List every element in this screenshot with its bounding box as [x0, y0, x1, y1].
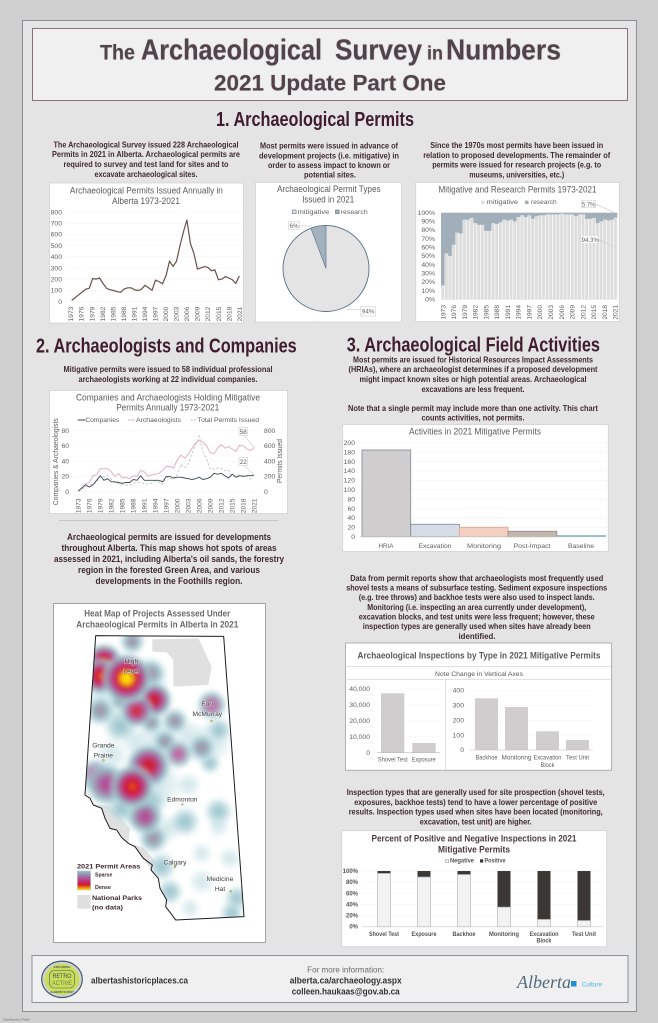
- combo line chart: companies and archaeologists: 80: [61, 428, 69, 435]
- archaeologists line: [78, 441, 254, 491]
- combo line chart: companies and archaeologists: 1976: [87, 498, 94, 513]
- bar: Monitoring: [459, 527, 508, 537]
- legend: Positive: [484, 859, 506, 865]
- line chart: permits issued annually: 2003: [174, 306, 181, 321]
- left inspections chart: 40,000: [349, 686, 370, 693]
- stacked bar chart: positive and negative: Excavation: [530, 931, 559, 938]
- line chart: permits issued annually: 1988: [121, 306, 128, 321]
- stacked bar chart: positive and negative: [342, 831, 607, 947]
- right inspections chart: 200: [453, 717, 464, 724]
- contact info: colleen.haukaas@gov.ab.ca: [292, 986, 401, 996]
- title line 1: The: [100, 42, 135, 64]
- right inspections chart: 300: [453, 702, 464, 710]
- line chart: permits issued annually: 2012: [205, 306, 212, 321]
- text: positive results: exposures, backhoe tests) tend to have a lower percentage of positive: [354, 797, 597, 807]
- line chart: permits issued annually: 1997: [152, 306, 160, 321]
- stacked bar chart: mitigative and research: [416, 182, 620, 322]
- text: permits since 1970s: Since the 1970s most permits have been issued in: [430, 140, 603, 150]
- axis title right: Permits Issued: [277, 439, 284, 483]
- callout 58: 58: [240, 429, 247, 436]
- small credit: Classification Fields: [3, 1018, 30, 1022]
- legend: Archaeologists: [136, 417, 182, 424]
- bar chart: activities: 20: [347, 525, 355, 532]
- text: archaeologists and companies: [64, 364, 272, 384]
- city labels: [92, 658, 234, 893]
- stacked bar chart: positive and negative: 20%: [346, 914, 359, 920]
- logo: Retro Active: ACTIVE: [52, 981, 72, 987]
- permits line: [72, 220, 239, 300]
- legend: research: [341, 209, 368, 216]
- combo line chart: companies and archaeologists: 1991: [142, 498, 149, 513]
- bar: Excavation: [411, 524, 459, 537]
- text: inspections: Monitoring (i.e. inspecting an area currently under development),: [367, 602, 586, 612]
- bar chart: activities: 80: [347, 496, 355, 503]
- heading: section 1: 1. Archaeological Permits: [216, 109, 414, 131]
- stacked bar chart: mitigative and research: 2015: [591, 305, 598, 320]
- text: inspections: inspection types are generally used when sites have already been: [363, 621, 591, 631]
- stacked bar chart: positive and negative: Shovel Test: [369, 931, 399, 938]
- bar chart: activities: 100: [344, 487, 355, 494]
- text: permits since 1970s: permits were issued for research projects (e.g. to: [432, 160, 601, 170]
- stacked bar chart: mitigative and research: 0%: [425, 296, 435, 304]
- combo line chart: companies and archaeologists: Companies and Archaeologists Holding Mitigative: [76, 393, 260, 403]
- text: inspections: Data from permit reports show that archaeologists most frequently used: [350, 573, 603, 583]
- text: HRIAs: excavations are less frequent.: [422, 384, 524, 394]
- combo line chart: companies and archaeologists: 60: [61, 443, 69, 450]
- bar charts: inspections by type: Note Change in Vertical Axes: [435, 671, 524, 678]
- callout 6%: 6%: [289, 223, 299, 230]
- title line 1: Archaeological: [141, 34, 322, 66]
- stacked bar chart: mitigative and research: 2006: [559, 305, 566, 320]
- stacked bar chart: mitigative and research: 60%: [421, 245, 435, 252]
- text: archaeologists and companies: archaeologists working at 22 individual companies.: [78, 374, 258, 384]
- stacked bar chart: mitigative and research: 80%: [421, 227, 435, 234]
- bar chart: activities: Monitoring: [467, 543, 502, 550]
- text: mitigative permits: order to assess impact to known or: [268, 160, 391, 170]
- right inspections chart: Test Unit: [566, 754, 589, 761]
- callout 6%: [288, 222, 312, 230]
- combo line chart: companies and archaeologists: 200: [264, 474, 276, 481]
- callout 94.3%: [582, 236, 615, 247]
- combo line chart: companies and archaeologists: [50, 390, 288, 514]
- map legend: 2021 Permit Areas: [77, 863, 141, 870]
- callout 94.3%: 94.3%: [582, 238, 599, 244]
- legend: Companies: [85, 417, 120, 424]
- legend: mitigative: [487, 199, 518, 206]
- legend: research: [531, 199, 557, 206]
- right inspections chart: Monitoring: [502, 754, 532, 761]
- legend: [446, 859, 506, 865]
- combo line chart: companies and archaeologists: 2021: [252, 498, 259, 513]
- city labels: Calgary: [164, 859, 187, 866]
- combo line chart: companies and archaeologists: 2018: [241, 498, 248, 513]
- bar chart: activities: 40: [347, 515, 355, 522]
- line chart: permits issued annually: 0: [58, 299, 62, 306]
- callout 22: [239, 457, 254, 475]
- text: HRIAs: Most permits are issued for Historical Resources Impact Assessments: [353, 354, 593, 364]
- bar chart: activities: Post-Impact: [514, 543, 551, 550]
- map title: Archaeological Permits in Alberta in 2021: [76, 619, 238, 629]
- stacked bar chart: positive and negative: 100%: [343, 869, 359, 875]
- bar chart: activities: 140: [344, 468, 355, 475]
- line chart: permits issued annually: 300: [51, 265, 62, 272]
- text: permits issued: The Archaeological Survey issued 228 Archaeological: [54, 139, 238, 149]
- text: permits issued: Permits in 2021 in Alberta. Archaeological permits are: [52, 149, 240, 159]
- combo line chart: companies and archaeologists: 1982: [109, 498, 116, 513]
- right inspections chart: Backhoe: [476, 754, 498, 761]
- stacked bar chart: positive and negative: 0%: [349, 925, 359, 931]
- stacked bar chart: positive and negative: 80%: [346, 880, 359, 886]
- line chart: permits issued annually: 1979: [89, 306, 96, 321]
- combo line chart: companies and archaeologists: 1979: [98, 498, 105, 513]
- combo line chart: companies and archaeologists: 2012: [219, 498, 226, 513]
- line chart: permits issued annually: 2009: [195, 306, 202, 321]
- bar: HRIA: [362, 450, 411, 537]
- map legend: [77, 863, 142, 912]
- callout 5.7%: [582, 200, 615, 213]
- bar: Baseline: [557, 536, 606, 537]
- bar chart: activities: Excavation: [418, 543, 452, 550]
- line chart: permits issued annually: 700: [51, 220, 62, 228]
- line chart: permits issued annually: 1985: [110, 306, 117, 321]
- mitigative bars: [441, 214, 617, 299]
- city labels: Hat: [215, 886, 225, 893]
- bar: Post-Impact: [508, 531, 557, 537]
- text: positive results: results. Inspection types used when sites have been located (monitoring,: [349, 807, 603, 817]
- combo line chart: companies and archaeologists: 1973: [76, 498, 83, 513]
- line chart: permits issued annually: 2015: [216, 306, 223, 321]
- text: map description: assessed in 2021, including Alberta's oil sands, the forestry: [54, 554, 285, 565]
- bar chart: activities: 0: [351, 534, 355, 541]
- stacked bar chart: mitigative and research: 2009: [570, 305, 576, 320]
- city labels: McMurray: [193, 711, 223, 718]
- title line 1: Numbers: [446, 34, 561, 66]
- map legend: Dense: [95, 885, 111, 891]
- total permits line: [78, 436, 254, 491]
- bar chart: activities: HRIA: [378, 543, 394, 550]
- bar chart: activities: 60: [347, 506, 355, 513]
- stacked bar chart: positive and negative: Test Unit: [572, 931, 596, 938]
- stacked bar chart: positive and negative: Monitoring: [489, 931, 519, 938]
- combo line chart: companies and archaeologists: Permits Annually 1973-2021: [116, 403, 219, 413]
- title line 2: 2021 Update Part One: [214, 70, 446, 96]
- stacked bar chart: mitigative and research: 2018: [602, 305, 609, 320]
- legend: [78, 417, 259, 424]
- title line 1: in: [427, 44, 443, 64]
- stacked bar chart: mitigative and research: 1985: [483, 305, 490, 320]
- text: positive results: Inspection types that are generally used for site prospection (shovel tests,: [347, 787, 605, 797]
- text: inspections: excavation blocks, and test units were less frequent; however, these: [359, 612, 595, 622]
- research bars: [441, 213, 617, 299]
- text: map description: region in the forested Green Area, and various: [78, 565, 260, 576]
- left inspections chart: [349, 686, 440, 764]
- national parks: [92, 638, 212, 870]
- line chart: permits issued annually: 400: [51, 254, 62, 261]
- logo: Retro Active: RETRO: [52, 973, 72, 980]
- bar chart: activities: Baseline: [568, 543, 594, 550]
- combo line chart: companies and archaeologists: 1994: [153, 498, 160, 513]
- combo line chart: companies and archaeologists: 1988: [131, 498, 138, 513]
- text: inspections: (e.g. tree throws) and backhoe tests were also used to inspect lands.: [359, 592, 595, 602]
- contact info: alberta.ca/archaeology.aspx: [290, 975, 402, 985]
- line chart: permits issued annually: 1991: [131, 306, 138, 321]
- stacked bar chart: mitigative and research: 1973: [440, 305, 447, 320]
- text: mitigative permits: Most permits were issued in advance of: [260, 141, 398, 151]
- city labels: Medicine: [207, 876, 234, 883]
- left inspections chart: Exposure: [412, 757, 436, 764]
- line chart: permits issued annually: Archaeological Permits Issued Annually in: [70, 186, 223, 196]
- combo line chart: companies and archaeologists: 400: [264, 458, 276, 466]
- callout 5.7%: 5.7%: [582, 202, 596, 208]
- bar charts: inspections by type: Archaeological Inspections by Type in 2021 Mitigative Permits: [358, 649, 600, 660]
- legend: Negative: [450, 859, 475, 865]
- text: permits issued: [52, 139, 240, 179]
- combo line chart: companies and archaeologists: 0: [264, 489, 268, 496]
- combo line chart: companies and archaeologists: 0: [65, 489, 69, 496]
- stacked bar chart: positive and negative: Backhoe: [452, 931, 476, 938]
- stacked bar chart: mitigative and research: 1979: [462, 305, 469, 320]
- text: inspections: [346, 573, 607, 641]
- stacked bar chart: mitigative and research: Mitigative and Research Permits 1973-2021: [438, 184, 596, 194]
- pie chart: permit types: Issued in 2021: [302, 195, 354, 205]
- text: mitigative permits: development projects (i.e. mitigative) in: [259, 150, 399, 160]
- stacked bar chart: mitigative and research: 40%: [421, 262, 435, 269]
- bar chart: activities: Activities in 2021 Mitigative Permits: [409, 427, 541, 437]
- stacked bar chart: mitigative and research: 1994: [516, 305, 523, 320]
- city labels: Edmonton: [167, 797, 198, 804]
- bar chart: activities: 120: [344, 478, 355, 485]
- map title: Heat Map of Projects Assessed Under: [84, 609, 231, 619]
- stacked bar chart: positive and negative: Mitigative Permits: [438, 845, 510, 856]
- callout 94%: 94%: [362, 309, 375, 316]
- text: archaeologists and companies: Mitigative permits were issued to 58 individual professional: [64, 364, 272, 374]
- line chart: permits issued annually: 600: [51, 232, 62, 239]
- combo line chart: companies and archaeologists: 2009: [208, 498, 215, 513]
- stacked bar chart: mitigative and research: 2003: [548, 305, 555, 320]
- line chart: permits issued annually: 1982: [100, 306, 107, 321]
- callout 22: 22: [240, 459, 247, 466]
- right inspections chart: [453, 688, 593, 769]
- right inspections chart: 100: [453, 732, 464, 739]
- heat spots: [86, 636, 244, 918]
- axis title left: Companies & Archaeologists: [53, 418, 60, 505]
- line chart: permits issued annually: 200: [51, 276, 62, 283]
- bar chart: activities: 200: [344, 440, 355, 447]
- stacked bar chart: positive and negative: 40%: [346, 902, 359, 908]
- text: positive results: [347, 787, 605, 826]
- companies line: [78, 473, 254, 491]
- stacked bar chart: positive and negative: Percent of Positive and Negative Inspections in 2021: [372, 834, 577, 845]
- stacked bar chart: positive and negative: 60%: [346, 891, 359, 897]
- city labels: High: [124, 658, 138, 665]
- logo: Alberta Culture: Culture: [582, 982, 602, 989]
- logo: Alberta Culture: [516, 972, 602, 992]
- left inspections chart: 30,000: [349, 702, 370, 709]
- logo: Retro Active: EXPLORING: [54, 965, 70, 969]
- map legend: (no data): [92, 905, 123, 912]
- heading: section 3: 3. Archaeological Field Activities: [347, 335, 600, 357]
- line chart: permits issued annually: [50, 183, 244, 323]
- right inspections chart: 0: [460, 747, 464, 754]
- combo line chart: companies and archaeologists: 2015: [230, 498, 237, 513]
- combo line chart: companies and archaeologists: 800: [264, 428, 276, 435]
- city labels: Grande: [92, 743, 115, 750]
- website: albertashistoricplaces.ca: [91, 976, 189, 986]
- callout 94%: [347, 307, 376, 316]
- contact info: For more information:: [307, 965, 384, 974]
- bar charts: inspections by type: [346, 643, 612, 770]
- combo line chart: companies and archaeologists: 20: [61, 474, 69, 481]
- text: inspections: identified.: [458, 631, 496, 641]
- pie chart: permit types: [256, 182, 402, 322]
- text: map description: throughout Alberta. This map shows hot spots of areas: [62, 543, 276, 554]
- legend: [292, 209, 368, 216]
- left inspections chart: Shovel Test: [378, 757, 408, 764]
- map title: [76, 609, 238, 629]
- line chart: permits issued annually: 2006: [184, 306, 191, 321]
- line chart: permits issued annually: 100: [51, 288, 62, 295]
- text: mitigative permits: potential sites.: [304, 170, 356, 180]
- line chart: permits issued annually: 500: [51, 243, 62, 250]
- left inspections chart: 10,000: [349, 734, 370, 741]
- title line 1: [100, 34, 561, 66]
- line chart: permits issued annually: Alberta 1973-2021: [112, 196, 180, 206]
- text: mitigative permits: [259, 141, 399, 180]
- stacked bar chart: mitigative and research: 2000: [537, 305, 544, 320]
- right inspections chart: 400: [453, 688, 464, 695]
- stacked bar chart: mitigative and research: 1991: [505, 305, 512, 320]
- text: HRIAs: (HRIAs), where an archaeologist determines if a proposed development: [348, 364, 598, 374]
- legend: [481, 199, 557, 206]
- text: map description: Archaeological permits are issued for developments: [67, 532, 271, 543]
- left inspections chart: 0: [366, 750, 370, 757]
- text: HRIAs: might impact known sites or high potential areas. Archaeological: [360, 374, 586, 384]
- text: HRIAs: Note that a single permit may include more than one activity. This chart: [348, 403, 598, 413]
- stacked bar chart: mitigative and research: 2012: [580, 305, 587, 320]
- Alberta outline: [85, 636, 244, 920]
- combo line chart: companies and archaeologists: 2003: [186, 498, 193, 513]
- text: permits issued: excavate archaeological sites.: [94, 169, 198, 179]
- combo line chart: companies and archaeologists: 1997: [164, 498, 171, 513]
- line chart: permits issued annually: 2021: [237, 306, 244, 321]
- positive bars: [378, 871, 590, 927]
- city labels: Fort: [201, 701, 213, 708]
- stacked bar chart: mitigative and research: 20%: [421, 279, 435, 286]
- line chart: permits issued annually: 1994: [142, 306, 149, 321]
- combo line chart: companies and archaeologists: 2006: [197, 498, 204, 513]
- pie chart: permit types: Archaeological Permit Types: [277, 184, 381, 194]
- text: HRIAs: [348, 354, 598, 423]
- pie: [283, 226, 369, 312]
- contact info: [290, 965, 402, 996]
- stacked bar chart: positive and negative: Exposure: [412, 931, 437, 938]
- right inspections chart: Excavation: [534, 754, 562, 761]
- stacked bar chart: mitigative and research: 1976: [451, 305, 458, 320]
- text: permits since 1970s: relation to proposed developments. The remainder of: [423, 150, 610, 160]
- text: map description: [54, 532, 285, 587]
- city labels: Prairie: [94, 753, 113, 760]
- text: positive results: excavation, test unit) are higher.: [420, 816, 532, 826]
- stacked bar chart: mitigative and research: 70%: [421, 236, 435, 243]
- heat map panel: [54, 604, 266, 942]
- stacked bar chart: mitigative and research: 2021: [613, 305, 620, 320]
- stacked bar chart: mitigative and research: 10%: [421, 288, 435, 295]
- stacked bar chart: mitigative and research: 1982: [473, 305, 480, 320]
- text: permits issued: required to survey and test land for sites and to: [64, 159, 228, 169]
- stacked bar chart: mitigative and research: 1997: [526, 305, 534, 320]
- title line 1: Survey: [335, 34, 422, 66]
- text: HRIAs: counts activities, not permits.: [422, 413, 524, 423]
- negative bars: [378, 874, 590, 927]
- footer panel: [32, 956, 628, 1002]
- map legend: National Parks: [92, 895, 142, 902]
- combo line chart: companies and archaeologists: 600: [264, 443, 276, 450]
- line chart: permits issued annually: 2018: [226, 306, 233, 321]
- combo line chart: companies and archaeologists: 1985: [120, 498, 127, 513]
- line chart: permits issued annually: 1973: [68, 306, 75, 321]
- stacked bar chart: mitigative and research: 90%: [421, 219, 435, 226]
- bar chart: activities: [343, 424, 608, 552]
- title banner: [32, 28, 628, 100]
- text: permits since 1970s: museums, universities, etc.): [469, 170, 564, 180]
- logo: Retro Active: [42, 961, 82, 998]
- stacked bar chart: mitigative and research: 50%: [421, 253, 435, 260]
- line chart: permits issued annually: 2000: [163, 306, 170, 321]
- stacked bar chart: mitigative and research: 30%: [421, 271, 435, 278]
- text: map description: developments in the Foothills region.: [96, 576, 242, 587]
- map legend: Sparse: [95, 873, 112, 879]
- bar chart: activities: 180: [344, 449, 355, 456]
- text: inspections: shovel tests a means of subsurface testing. Sediment exposure inspections: [346, 583, 607, 593]
- text: permits since 1970s: [423, 140, 610, 180]
- stacked bar chart: mitigative and research: 100%: [418, 210, 435, 217]
- legend: Total Permits Issued: [198, 417, 259, 424]
- logo: Retro Active: ALBERTA'S PAST: [50, 990, 74, 994]
- stacked bar chart: mitigative and research: 1988: [494, 305, 501, 320]
- callout 58: [239, 427, 254, 447]
- right inspections chart: Block: [540, 762, 555, 769]
- combo line chart: companies and archaeologists: 40: [61, 458, 69, 466]
- line chart: permits issued annually: 800: [51, 209, 62, 216]
- legend: mitigative: [298, 209, 330, 216]
- logo: Alberta Culture: Alberta: [516, 972, 571, 992]
- heading: section 2: 2. Archaeologists and Companies: [36, 336, 297, 358]
- stacked bar chart: positive and negative: Block: [536, 938, 552, 945]
- combo line chart: companies and archaeologists: 2000: [175, 498, 182, 513]
- bar chart: activities: 160: [344, 459, 355, 466]
- left inspections chart: 20,000: [349, 718, 370, 725]
- city labels: Level: [123, 669, 140, 676]
- line chart: permits issued annually: 1976: [79, 306, 86, 321]
